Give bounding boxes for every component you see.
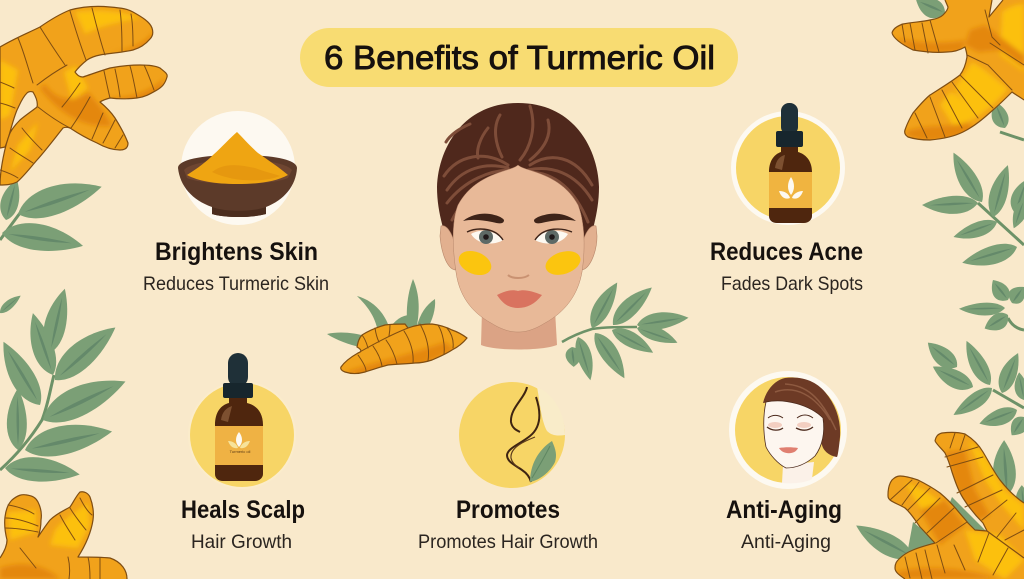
leaves: middle right [922,276,1024,440]
turmeric root: top right [888,0,1024,142]
label: Anti-Aging [726,496,842,553]
icon: oil bottle, reduces acne [731,103,845,225]
icon: bowl of turmeric powder [178,111,297,225]
icon: hair strand [459,382,565,488]
leaves: top left [0,172,106,257]
turmeric root: bottom left [0,490,130,579]
sub-label: Anti-Aging [741,531,831,553]
leaves behind centre root [327,279,435,347]
title: 6 Benefits of Turmeric Oil [324,39,715,76]
label: Brightens Skin [143,238,329,295]
sub-label: Promotes Hair Growth [418,531,598,553]
hair [763,378,840,457]
ears [440,226,456,270]
hair strands [444,106,592,222]
brows [463,214,504,223]
leaves: bottom right [850,440,1024,579]
lips [779,447,798,453]
face shape [453,165,584,332]
label: Reduces Acne: Reduces Acne [710,238,863,266]
eyes [471,231,503,244]
title pill [300,28,738,87]
label: Promotes [418,496,598,553]
label: Anti-Aging: Anti-Aging [726,496,842,524]
sub-label: Reduces Turmeric Skin [143,273,329,295]
icon: anti-aging face [729,371,847,489]
turmeric root: top left [0,0,170,190]
label: Reduces Acne [710,238,863,295]
nose [508,275,529,278]
hair [437,103,599,260]
closed eyes [767,427,813,430]
leaves: centre sprig [562,278,690,382]
turmeric root: bottom right [885,430,1024,579]
label: Heals Scalp: Heals Scalp [181,496,305,524]
sub-label: Fades Dark Spots [721,273,863,295]
label: Heals Scalp [181,496,305,553]
leaves: upper right [911,0,1024,273]
neck [782,462,814,483]
leaves: mid left [0,286,131,485]
turmeric cheek patches [455,246,495,280]
icon: face with turmeric mask [437,103,599,350]
label: Brightens Skin: Brightens Skin [155,238,318,266]
face [764,401,824,468]
icon: oil bottle, heals scalp [188,353,296,489]
neck [481,310,557,350]
label: Promotes: Promotes [456,496,560,524]
bottle label text: Turmeric oil [230,449,250,454]
sub-label: Hair Growth [191,531,292,553]
centre turmeric root [340,323,468,374]
lips [497,290,542,308]
